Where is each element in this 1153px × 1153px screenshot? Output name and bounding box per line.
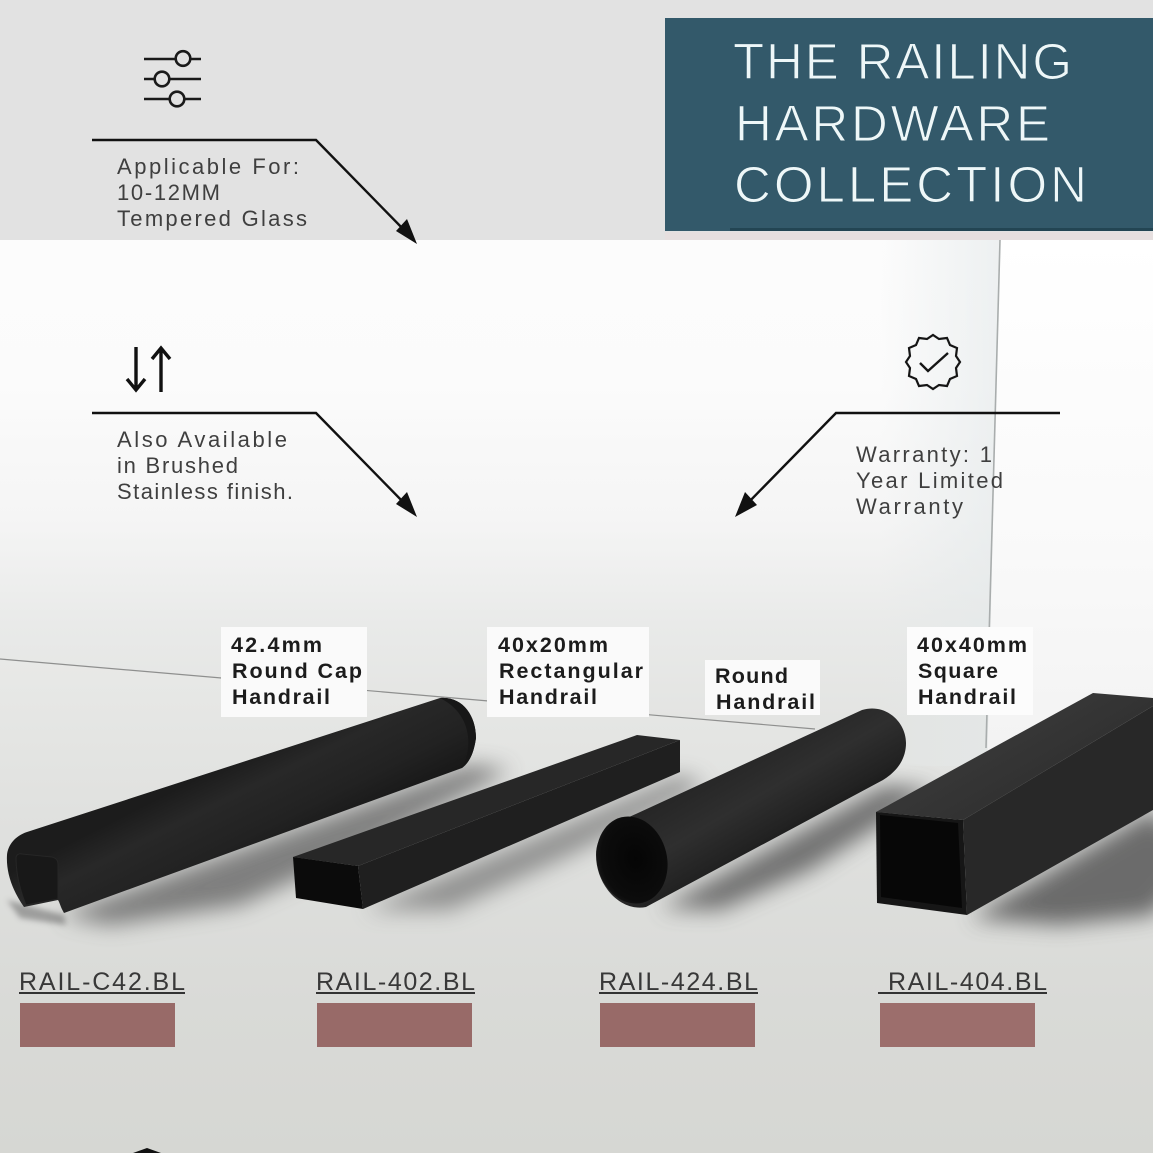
title text: COLLECTION bbox=[734, 156, 1087, 213]
product code: RAIL-424.BL bbox=[599, 968, 758, 1047]
arrow: applicable for bbox=[92, 140, 417, 244]
text: warranty: Warranty bbox=[856, 494, 963, 519]
label: 42.4mm round cap handrail: Handrail bbox=[232, 685, 330, 709]
text: brushed finish: Also Available bbox=[117, 427, 287, 452]
label: round handrail: Round bbox=[715, 664, 788, 688]
label: 40x40mm square handrail bbox=[907, 627, 1033, 715]
text: applicable for: 10-12MM bbox=[117, 180, 220, 205]
product code: RAIL-C42.BL bbox=[19, 968, 185, 1047]
product: round cap handrail bbox=[7, 698, 476, 913]
product code: RAIL-424.BL: RAIL-424.BL bbox=[599, 968, 758, 996]
title panel bbox=[665, 18, 1153, 240]
product code: RAIL-404.BL: RAIL-404.BL bbox=[888, 968, 1047, 996]
room background: wall bbox=[0, 240, 1153, 770]
text: warranty: Year Limited bbox=[856, 468, 1003, 493]
label: 42.4mm round cap handrail: Round Cap bbox=[232, 659, 362, 683]
shadows under rails bbox=[7, 765, 1153, 925]
colour swatch bbox=[317, 1003, 472, 1047]
product code: RAIL-C42.BL: RAIL-C42.BL bbox=[19, 968, 185, 996]
text: brushed finish: Stainless finish. bbox=[117, 479, 293, 504]
icon: sliders bbox=[144, 51, 201, 106]
title text: HARDWARE bbox=[735, 95, 1050, 152]
text: applicable for: Tempered Glass bbox=[117, 206, 307, 231]
text: applicable for bbox=[117, 154, 307, 231]
colour swatch bbox=[20, 1003, 175, 1047]
text: warranty bbox=[856, 442, 1003, 519]
title text: THE RAILING bbox=[733, 33, 1072, 90]
text: applicable for: Applicable For: bbox=[117, 154, 299, 179]
label: 42.4mm round cap handrail: 42.4mm bbox=[231, 633, 322, 657]
label: 40x40mm square handrail: Square bbox=[918, 659, 998, 683]
label: 40x40mm square handrail: 40x40mm bbox=[917, 633, 1027, 657]
arrow: brushed finish bbox=[92, 413, 417, 517]
label: 40x20mm rectangular handrail bbox=[487, 627, 649, 717]
colour swatch bbox=[600, 1003, 755, 1047]
text: brushed finish bbox=[117, 427, 293, 504]
colour swatch bbox=[880, 1003, 1035, 1047]
label: round handrail bbox=[705, 660, 820, 715]
top grey band bbox=[0, 0, 1153, 240]
label: 40x20mm rectangular handrail: 40x20mm bbox=[498, 633, 608, 657]
icon fragment at bottom edge bbox=[133, 1148, 161, 1153]
title text bbox=[733, 33, 1087, 213]
product code: RAIL-402.BL bbox=[316, 968, 475, 1047]
label: 42.4mm round cap handrail bbox=[221, 627, 367, 717]
arrow: warranty bbox=[735, 413, 1060, 517]
product code: RAIL-404.BL bbox=[878, 968, 1047, 1047]
label: 40x20mm rectangular handrail: Rectangular bbox=[499, 659, 644, 683]
product: rectangular handrail bbox=[293, 735, 680, 909]
label: round handrail: Handrail bbox=[716, 690, 815, 714]
text: warranty: Warranty: 1 bbox=[856, 442, 992, 467]
label: 40x40mm square handrail: Handrail bbox=[918, 685, 1016, 709]
room background: floor bbox=[0, 659, 1153, 1153]
product code: RAIL-402.BL: RAIL-402.BL bbox=[316, 968, 475, 996]
icon: up and down arrows bbox=[127, 347, 170, 392]
product: round handrail bbox=[587, 709, 906, 911]
product: square handrail bbox=[876, 693, 1153, 915]
label: 40x20mm rectangular handrail: Handrail bbox=[499, 685, 597, 709]
icon: warranty badge bbox=[906, 335, 960, 389]
text: brushed finish: in Brushed bbox=[117, 453, 238, 478]
